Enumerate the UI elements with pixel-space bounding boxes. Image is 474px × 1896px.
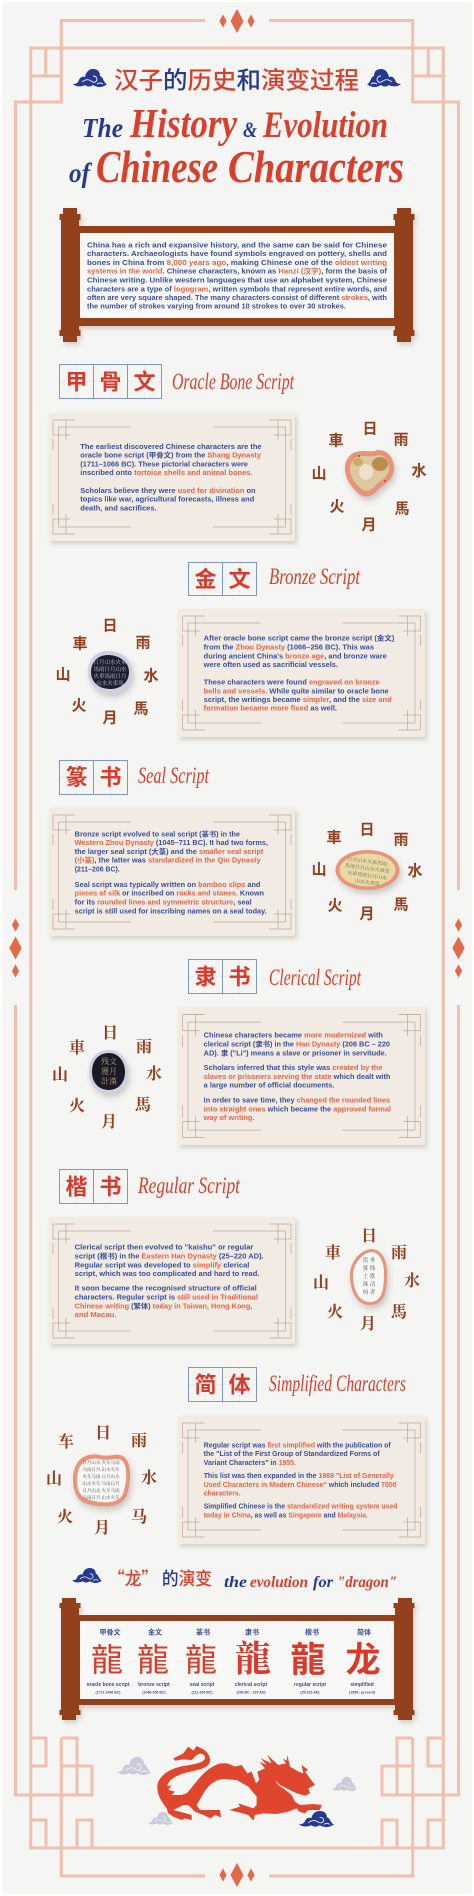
script names in english: oracle bone script bbox=[86, 1682, 130, 1688]
panel: seal text card: the larger seal script (大篆) and the smaller seal script bbox=[75, 847, 264, 856]
panel: seal text card: Seal script was typically written on bamboo slips and bbox=[75, 882, 260, 889]
heading: evolution for dragon: “龙” 的演变 bbox=[108, 1565, 212, 1591]
illustration: clerical rubbing with characters: 日 bbox=[102, 1020, 118, 1043]
script names in english: seal script bbox=[190, 1682, 215, 1688]
script names in english: regular script bbox=[294, 1682, 326, 1688]
illustration: regular script page with characters: 馬 bbox=[391, 1299, 407, 1322]
right side diamonds bbox=[452, 918, 465, 978]
illustration: oracle bone with characters: 火 bbox=[329, 496, 345, 516]
panel: clerical text card bbox=[178, 1007, 425, 1145]
icon: blue cloud left of title bbox=[73, 69, 107, 87]
panel: simplified text card: Regular script was first simplified with the publication of bbox=[204, 1442, 391, 1449]
panel: clerical text card: AD). 隶 ("Li") means a slave or prisoner in servitude. bbox=[204, 1048, 387, 1057]
illustration: simplified script page with characters: 雨 bbox=[131, 1428, 147, 1451]
script names in chinese: 楷书 bbox=[305, 1628, 319, 1636]
panel: seal text card: Bronze script evolved to seal script (篆书) in the bbox=[75, 829, 240, 838]
illustration: oracle bone with characters: 雨 bbox=[393, 428, 409, 450]
panel: clerical text card: clerical script (隶书) in the Han Dynasty (206 BC – 220 bbox=[204, 1040, 390, 1049]
illustration: seal bamboo slips with characters: 山 bbox=[311, 858, 327, 880]
script names in chinese: 篆书 bbox=[196, 1628, 210, 1636]
heading: simplified characters bbox=[188, 1367, 406, 1402]
illustration: seal bamboo slips with characters: 車 bbox=[326, 826, 342, 848]
heading: seal script: 篆 bbox=[65, 765, 88, 790]
heading: seal script bbox=[59, 760, 209, 794]
panel: oracle bone text card: The earliest discovered Chinese characters are the bbox=[80, 444, 262, 451]
illustration: regular script page with characters: 柯 者 bbox=[363, 1288, 376, 1296]
illustration: clerical rubbing with characters bbox=[52, 1020, 162, 1132]
illustration: simplified script page with characters: 火 bbox=[57, 1504, 73, 1527]
heading: regular script: 书 bbox=[99, 1174, 122, 1200]
illustration: simplified script page with characters: 山水火车 马雨日月 bbox=[82, 1480, 120, 1487]
english title: Characters bbox=[228, 141, 404, 192]
english title: The bbox=[82, 113, 123, 143]
illustration: simplified script page with characters: 车 bbox=[58, 1429, 74, 1452]
dragon characters: 龍 bbox=[137, 1635, 169, 1681]
panel: simplified text card: the "List of the First Group of Standardized Forms of bbox=[204, 1451, 380, 1458]
panel: regular text card: Clerical script then evolved to "kaishu" or regular bbox=[75, 1245, 254, 1252]
panel: clerical text card: In order to save time, they changed the rounded lines bbox=[204, 1097, 390, 1104]
illustration: simplified script page with characters: 山 bbox=[46, 1466, 62, 1489]
script dates: (206 BC - 220 AD) bbox=[236, 1690, 266, 1694]
illustration: regular script page with characters: 雨 bbox=[391, 1240, 407, 1263]
icon: pale cloud left bbox=[117, 1757, 151, 1775]
panel: seal text card: Western Zhou Dynasty (1045–711 BC). It had two forms, bbox=[75, 840, 268, 847]
illustration: regular script page with characters: 水 bbox=[404, 1268, 420, 1291]
illustration: simplified script page with characters: 火车马雨 日月山水 bbox=[82, 1473, 120, 1480]
intro text: often are very square shaped. The many characters consist of different strokes, with bbox=[87, 295, 387, 302]
illustration: bronze vessel rubbing with characters: 雨 bbox=[135, 632, 151, 652]
script dates: (1711-1066 BC) bbox=[96, 1690, 120, 1694]
panel: oracle bone text card: oracle bone script (甲骨文) from the Shang Dynasty bbox=[80, 451, 261, 460]
heading: bronze script bbox=[188, 562, 360, 596]
illustration: oracle bone with characters: 水 bbox=[411, 460, 427, 480]
intro text: characters are a type of logogram , written symbols that represent entire words, and bbox=[87, 286, 387, 293]
illustration: simplified script page with characters: 马雨日月 山水火车 bbox=[82, 1466, 120, 1473]
illustration: seal bamboo slips with characters: 日 bbox=[359, 818, 375, 840]
illustration: seal bamboo slips with characters: 馬雨日月山水火車馬 bbox=[344, 862, 390, 875]
panel: simplified text card: Variant Characters" in 1955. bbox=[204, 1460, 296, 1467]
illustration: clerical rubbing with characters: 山 bbox=[52, 1062, 68, 1085]
panel: regular text card bbox=[49, 1217, 295, 1344]
illustration: regular script page with characters: 車 bbox=[325, 1240, 341, 1263]
panel: seal text card: script is still used for inscribing names on a seal today. bbox=[75, 908, 267, 915]
illustration: oracle bone with characters: 車 bbox=[328, 430, 344, 450]
english title: & bbox=[243, 117, 257, 142]
panel: bronze text card: formation became more fixed as well. bbox=[204, 706, 337, 713]
panel: bronze text card: during ancient China's bronze age , and bronze ware bbox=[204, 653, 387, 660]
illustration: simplified script page with characters: 马雨日月 山水火车 bbox=[82, 1494, 120, 1501]
panel: seal text card: for its rounded lines and symmetric structure , seal bbox=[75, 899, 252, 906]
panel: clerical text card: Scholars inferred that this style was created by the bbox=[204, 1065, 383, 1072]
panel: bronze text card: After oracle bone script came the bronze script (金文) bbox=[204, 634, 394, 643]
icon: pale cloud right bbox=[332, 1777, 357, 1791]
intro text: bones in China from 8,000 years ago , making Chinese one of the oldest writing bbox=[87, 260, 387, 267]
illustration: regular script page with characters: 日 bbox=[361, 1223, 377, 1246]
illustration: regular script page with characters: 珠 清 bbox=[363, 1280, 376, 1288]
illustration: regular script page with characters: 山 bbox=[313, 1270, 329, 1293]
intro text: characters. Archaeologists have found symbols engraved on pottery, shells and bbox=[87, 251, 387, 258]
panel: oracle bone text card bbox=[49, 413, 295, 541]
panel: clerical text card: a large number of official documents. bbox=[204, 1083, 334, 1090]
dragon characters bbox=[91, 1631, 381, 1683]
panel: simplified text card: Simplified Chinese is the standardized writing system used bbox=[204, 1504, 397, 1511]
script names in chinese bbox=[100, 1628, 371, 1636]
illustration: seal bamboo slips with characters bbox=[311, 818, 423, 924]
heading: simplified characters: 简 bbox=[194, 1372, 217, 1398]
panel: oracle bone text card: death, and sacrifices. bbox=[80, 505, 157, 512]
illustration: seal bamboo slips with characters: 火 bbox=[327, 894, 343, 916]
illustration: regular script page with characters: 泼 垂 bbox=[363, 1256, 376, 1264]
script names in chinese: 甲骨文 bbox=[100, 1628, 120, 1636]
panel: regular text card: characters. Regular script is still used in Traditional bbox=[75, 1295, 258, 1302]
script names in chinese: 隶书 bbox=[245, 1628, 259, 1636]
illustration: simplified script page with characters: 日 bbox=[95, 1420, 111, 1443]
heading: bronze script: 金 bbox=[194, 567, 217, 592]
english title: History bbox=[129, 100, 238, 146]
panel: clerical text card: into straight ones which became the approved formal bbox=[204, 1106, 391, 1113]
heading: oracle bone script: 甲 bbox=[65, 370, 88, 394]
illustration: bronze vessel rubbing with characters: 車 bbox=[72, 632, 88, 654]
intro text bbox=[87, 242, 388, 311]
illustration: bronze vessel rubbing with characters: 山水火車馬 bbox=[96, 679, 124, 687]
heading: oracle bone script: 骨 bbox=[99, 370, 122, 394]
illustration: regular script page with characters: 雾 线 bbox=[363, 1264, 376, 1272]
illustration: clerical rubbing with characters: 水 bbox=[146, 1061, 162, 1084]
panel: bronze text card: were often used as sacrificial vessels. bbox=[203, 662, 338, 669]
bottom diamonds bbox=[219, 1863, 255, 1887]
illustration: seal bamboo slips with characters: 月 bbox=[359, 902, 375, 924]
illustration: bronze vessel rubbing with characters: 馬雨日月山水 bbox=[93, 665, 127, 673]
illustration: seal bamboo slips with characters: 馬 bbox=[393, 894, 409, 914]
illustration: regular script page with characters bbox=[313, 1223, 420, 1334]
panel: regular text card: It soon became the recognised structure of official bbox=[75, 1286, 257, 1293]
heading: oracle bone script: 文 bbox=[133, 370, 156, 394]
dragon scroll panel bbox=[60, 1598, 414, 1720]
intro text: China has a rich and expansive history, and the same can be said for Chinese bbox=[87, 242, 387, 249]
heading: seal script: Seal Script bbox=[138, 763, 209, 788]
english title: Chinese bbox=[96, 141, 218, 192]
heading: regular script bbox=[59, 1169, 240, 1204]
panel: regular text card: script, which was too complicated and hard to read. bbox=[75, 1271, 259, 1278]
script dates: (1956 - present) bbox=[349, 1690, 375, 1694]
illustration: seal bamboo slips with characters: 火車馬雨日月山水 bbox=[347, 869, 388, 882]
illustration: bronze vessel rubbing with characters: 火 bbox=[71, 694, 87, 716]
heading: oracle bone script: Oracle Bone Script bbox=[172, 369, 294, 394]
chinese title: 汉子的历史和演变过程 bbox=[114, 60, 359, 96]
english title: of bbox=[69, 158, 93, 188]
heading: clerical script: Clerical Script bbox=[269, 965, 361, 990]
illustration: simplified script page with characters: 水 bbox=[141, 1465, 157, 1488]
panel: clerical text card: way of writing. bbox=[203, 1115, 254, 1122]
english title bbox=[69, 100, 404, 192]
illustration: clerical rubbing with characters: 火 bbox=[69, 1093, 85, 1116]
heading: seal script: 书 bbox=[99, 765, 122, 790]
panel: clerical text card: Chinese characters became more modernized with bbox=[204, 1033, 383, 1040]
heading: bronze script: Bronze Script bbox=[269, 564, 360, 589]
illustration: bronze vessel rubbing with characters: 日月山水火車 bbox=[93, 658, 127, 666]
panel: regular text card: Chinese writing (繁体) today in Taiwan, Hong Kong, bbox=[75, 1301, 252, 1310]
panel: bronze text card: bells and vessels. While quite similar to oracle bone bbox=[204, 688, 389, 695]
illustration: clerical rubbing with characters: 雨 bbox=[136, 1034, 152, 1057]
panel: oracle bone text card: (1711–1066 BC). These pictorial characters were bbox=[80, 462, 248, 468]
script names in english: simplified bbox=[350, 1682, 374, 1688]
illustration: clerical rubbing with characters: 馬 bbox=[135, 1092, 151, 1115]
intro text: the number of strokes varying from around 10 strokes to over 30 strokes. bbox=[87, 304, 346, 311]
illustration: oracle bone with characters bbox=[311, 418, 427, 534]
panel: bronze text card: script, the writings became simpler , and the size and bbox=[204, 697, 392, 704]
heading: evolution for dragon: the bbox=[224, 1574, 247, 1591]
illustration: oracle bone with characters: 月 bbox=[361, 514, 377, 534]
heading: regular script: 楷 bbox=[65, 1174, 88, 1200]
icon: blue cloud right of title bbox=[367, 69, 401, 87]
illustration: regular script page with characters: 火 bbox=[327, 1299, 343, 1322]
dragon characters: 龍 bbox=[185, 1635, 217, 1681]
illustration: bronze vessel rubbing with characters: 火車馬雨日月 bbox=[93, 672, 127, 680]
heading: evolution for dragon: "dragon" bbox=[337, 1574, 397, 1591]
panel: regular text card: script (楷书) in the Eastern Han Dynasty (25–220 AD). bbox=[75, 1251, 264, 1260]
heading: clerical script: 隶 bbox=[194, 964, 217, 990]
illustration: seal bamboo slips with characters: 山水火車馬 bbox=[354, 877, 380, 888]
illustration: regular script page with characters: 土 歌 bbox=[363, 1272, 376, 1280]
panel: clerical text card: slaves or prisoners serving the state which dealt with bbox=[204, 1074, 390, 1081]
script names in chinese: 简体 bbox=[357, 1628, 371, 1636]
intro text: Chinese writing. Unlike western languages that use an alphabet system, Chinese bbox=[87, 277, 387, 284]
icon: pale cloud bottom bbox=[148, 1812, 173, 1825]
heading: evolution for dragon: for bbox=[313, 1574, 334, 1591]
script dates: (25-220 AD) bbox=[300, 1690, 320, 1694]
illustration: bronze vessel rubbing with characters: 水 bbox=[143, 664, 159, 686]
dragon characters: 龍 bbox=[290, 1632, 326, 1683]
panel: seal text card: (211–206 BC). bbox=[75, 866, 120, 873]
illustration: clerical rubbing with characters: 車 bbox=[69, 1035, 85, 1058]
panel: oracle bone text card: topics like war, agricultural forecasts, illness and bbox=[80, 497, 254, 504]
heading: clerical script: 书 bbox=[228, 964, 251, 990]
panel: seal text card: pieces of silk or inscribed on rocks and stones. Known bbox=[75, 891, 264, 898]
icon: blue cloud under dragon bbox=[299, 1811, 334, 1827]
dragon characters: 龙 bbox=[345, 1632, 381, 1683]
panel: oracle bone text card: inscribed onto tortoise shells and animal bones. bbox=[80, 470, 253, 477]
script names in english: clerical script bbox=[235, 1682, 267, 1688]
illustration: bronze vessel rubbing with characters: 日 bbox=[102, 614, 118, 636]
illustration: oracle bone with characters: 馬 bbox=[394, 498, 410, 518]
heading: bronze script: 文 bbox=[228, 567, 251, 592]
intro scroll panel bbox=[60, 208, 414, 342]
heading: clerical script bbox=[188, 959, 361, 994]
illustration: bronze vessel rubbing with characters: 山 bbox=[55, 664, 71, 684]
heading: simplified characters: Simplified Characters bbox=[269, 1371, 406, 1396]
illustration: simplified script page with characters: 月 bbox=[94, 1515, 110, 1538]
script names in english bbox=[86, 1682, 374, 1688]
panel: oracle bone text card: Scholars believe they were used for divination on bbox=[80, 488, 256, 495]
script dates: (211-206 BC) bbox=[191, 1690, 213, 1694]
illustration: simplified script page with characters: 日月山水 火车马雨 bbox=[82, 1487, 120, 1494]
panel: bronze text card bbox=[178, 609, 425, 737]
illustration: simplified script page with characters: 日月山水 火车马雨 bbox=[82, 1459, 120, 1466]
top diamonds bbox=[219, 9, 255, 33]
script names in english: bronze script bbox=[138, 1682, 170, 1688]
panel: simplified text card: characters. bbox=[204, 1491, 241, 1498]
illustration: simplified script page with characters bbox=[46, 1420, 157, 1538]
heading: regular script: Regular Script bbox=[137, 1173, 240, 1198]
script dates bbox=[96, 1690, 375, 1694]
illustration: bronze vessel rubbing with characters: 月 bbox=[102, 706, 118, 728]
illustration: oracle bone with characters: 日 bbox=[362, 418, 378, 438]
illustration: clerical rubbing with characters: 計漢 bbox=[101, 1076, 117, 1087]
panel: seal text card bbox=[49, 808, 295, 936]
panel: regular text card: and Macau. bbox=[75, 1312, 116, 1319]
illustration: simplified script page with characters: 马 bbox=[131, 1504, 147, 1527]
heading: simplified characters: 体 bbox=[228, 1372, 251, 1398]
illustration: bronze vessel rubbing with characters: 馬 bbox=[133, 698, 149, 718]
heading: oracle bone script bbox=[59, 364, 294, 399]
panel: bronze text card: These characters were found engraved on bronze bbox=[204, 679, 380, 686]
intro text: systems in the world . Chinese characters, known as Hanzi (汉字) , form the basis of bbox=[87, 267, 388, 276]
panel: regular text card: Regular script was developed to simplify clerical bbox=[75, 1262, 249, 1269]
illustration: oracle bone with characters: 山 bbox=[311, 462, 327, 484]
illustration: seal bamboo slips with characters: 水 bbox=[407, 860, 423, 880]
english title: Evolution bbox=[262, 105, 388, 146]
heading: evolution for dragon: evolution bbox=[250, 1574, 308, 1591]
script dates: (1066-256 BC) bbox=[142, 1690, 166, 1694]
panel: bronze text card: from the Zhou Dynasty (1066–256 BC). This was bbox=[204, 644, 374, 651]
illustration: clerical rubbing with characters: 残文 bbox=[101, 1056, 117, 1067]
dragon characters: 龍 bbox=[235, 1631, 271, 1682]
illustration: bronze vessel rubbing with characters bbox=[55, 614, 159, 728]
panel: simplified text card: This list was then expanded in the 1988 "List of Generally bbox=[204, 1473, 394, 1480]
panel: simplified text card: Used Characters in Modern Chinese" which included 7000 bbox=[204, 1482, 397, 1489]
icon: red dragon bbox=[157, 1746, 322, 1821]
illustration: seal bamboo slips with characters: 日月山水火車馬雨 bbox=[347, 855, 388, 868]
panel: simplified text card bbox=[178, 1416, 425, 1544]
illustration: clerical rubbing with characters: 獲月 bbox=[101, 1066, 117, 1077]
dragon characters: 龍 bbox=[91, 1635, 123, 1681]
panel: simplified text card: today in China, as well as Singapore and Malaysia. bbox=[204, 1513, 368, 1520]
left side diamonds bbox=[9, 918, 22, 978]
script names in chinese: 金文 bbox=[148, 1628, 162, 1636]
heading: evolution for dragon bbox=[72, 1565, 397, 1591]
illustration: regular script page with characters: 月 bbox=[360, 1311, 376, 1334]
illustration: seal bamboo slips with characters: 雨 bbox=[393, 828, 409, 850]
panel: seal text card: (小篆), the latter was standardized in the Qin Dynasty bbox=[75, 856, 261, 865]
illustration: clerical rubbing with characters: 月 bbox=[101, 1109, 117, 1132]
